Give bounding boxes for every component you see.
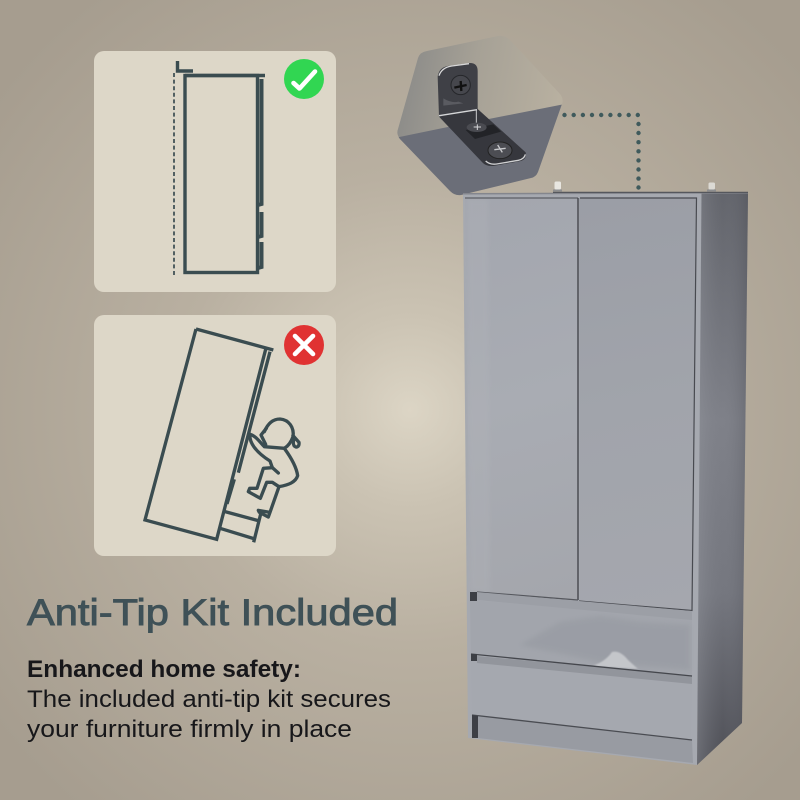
icon: red cross badge	[284, 325, 324, 365]
icon: anti-tip bracket close-up hexagon	[397, 38, 562, 196]
icon: climbing child	[248, 419, 299, 517]
text block: safety description: Enhanced home safety:	[27, 656, 301, 683]
dotted connector line	[562, 113, 641, 190]
wardrobe front frame	[463, 193, 702, 765]
text block: safety description: your furniture firmly in place	[27, 716, 352, 743]
upper drawer	[470, 592, 692, 676]
text block: safety description: The included anti-tip kit secures	[27, 686, 391, 713]
lower drawer	[471, 654, 692, 740]
left door	[465, 198, 578, 600]
icon: tipping wardrobe	[145, 329, 273, 542]
anti-tip brackets on top	[553, 182, 716, 192]
right door	[579, 198, 696, 610]
text block: safety description	[27, 656, 391, 743]
wardrobe	[463, 182, 748, 765]
icon: wardrobe side view fixed to wall	[174, 61, 265, 276]
panel: correct, anchored wardrobe	[94, 51, 336, 292]
panel: incorrect, child climbing	[94, 315, 336, 556]
wardrobe side panel	[697, 193, 748, 765]
icon: green check badge	[284, 59, 324, 99]
bracket	[438, 63, 526, 166]
plinth	[472, 715, 693, 763]
heading: Anti-Tip Kit Included	[27, 592, 398, 633]
